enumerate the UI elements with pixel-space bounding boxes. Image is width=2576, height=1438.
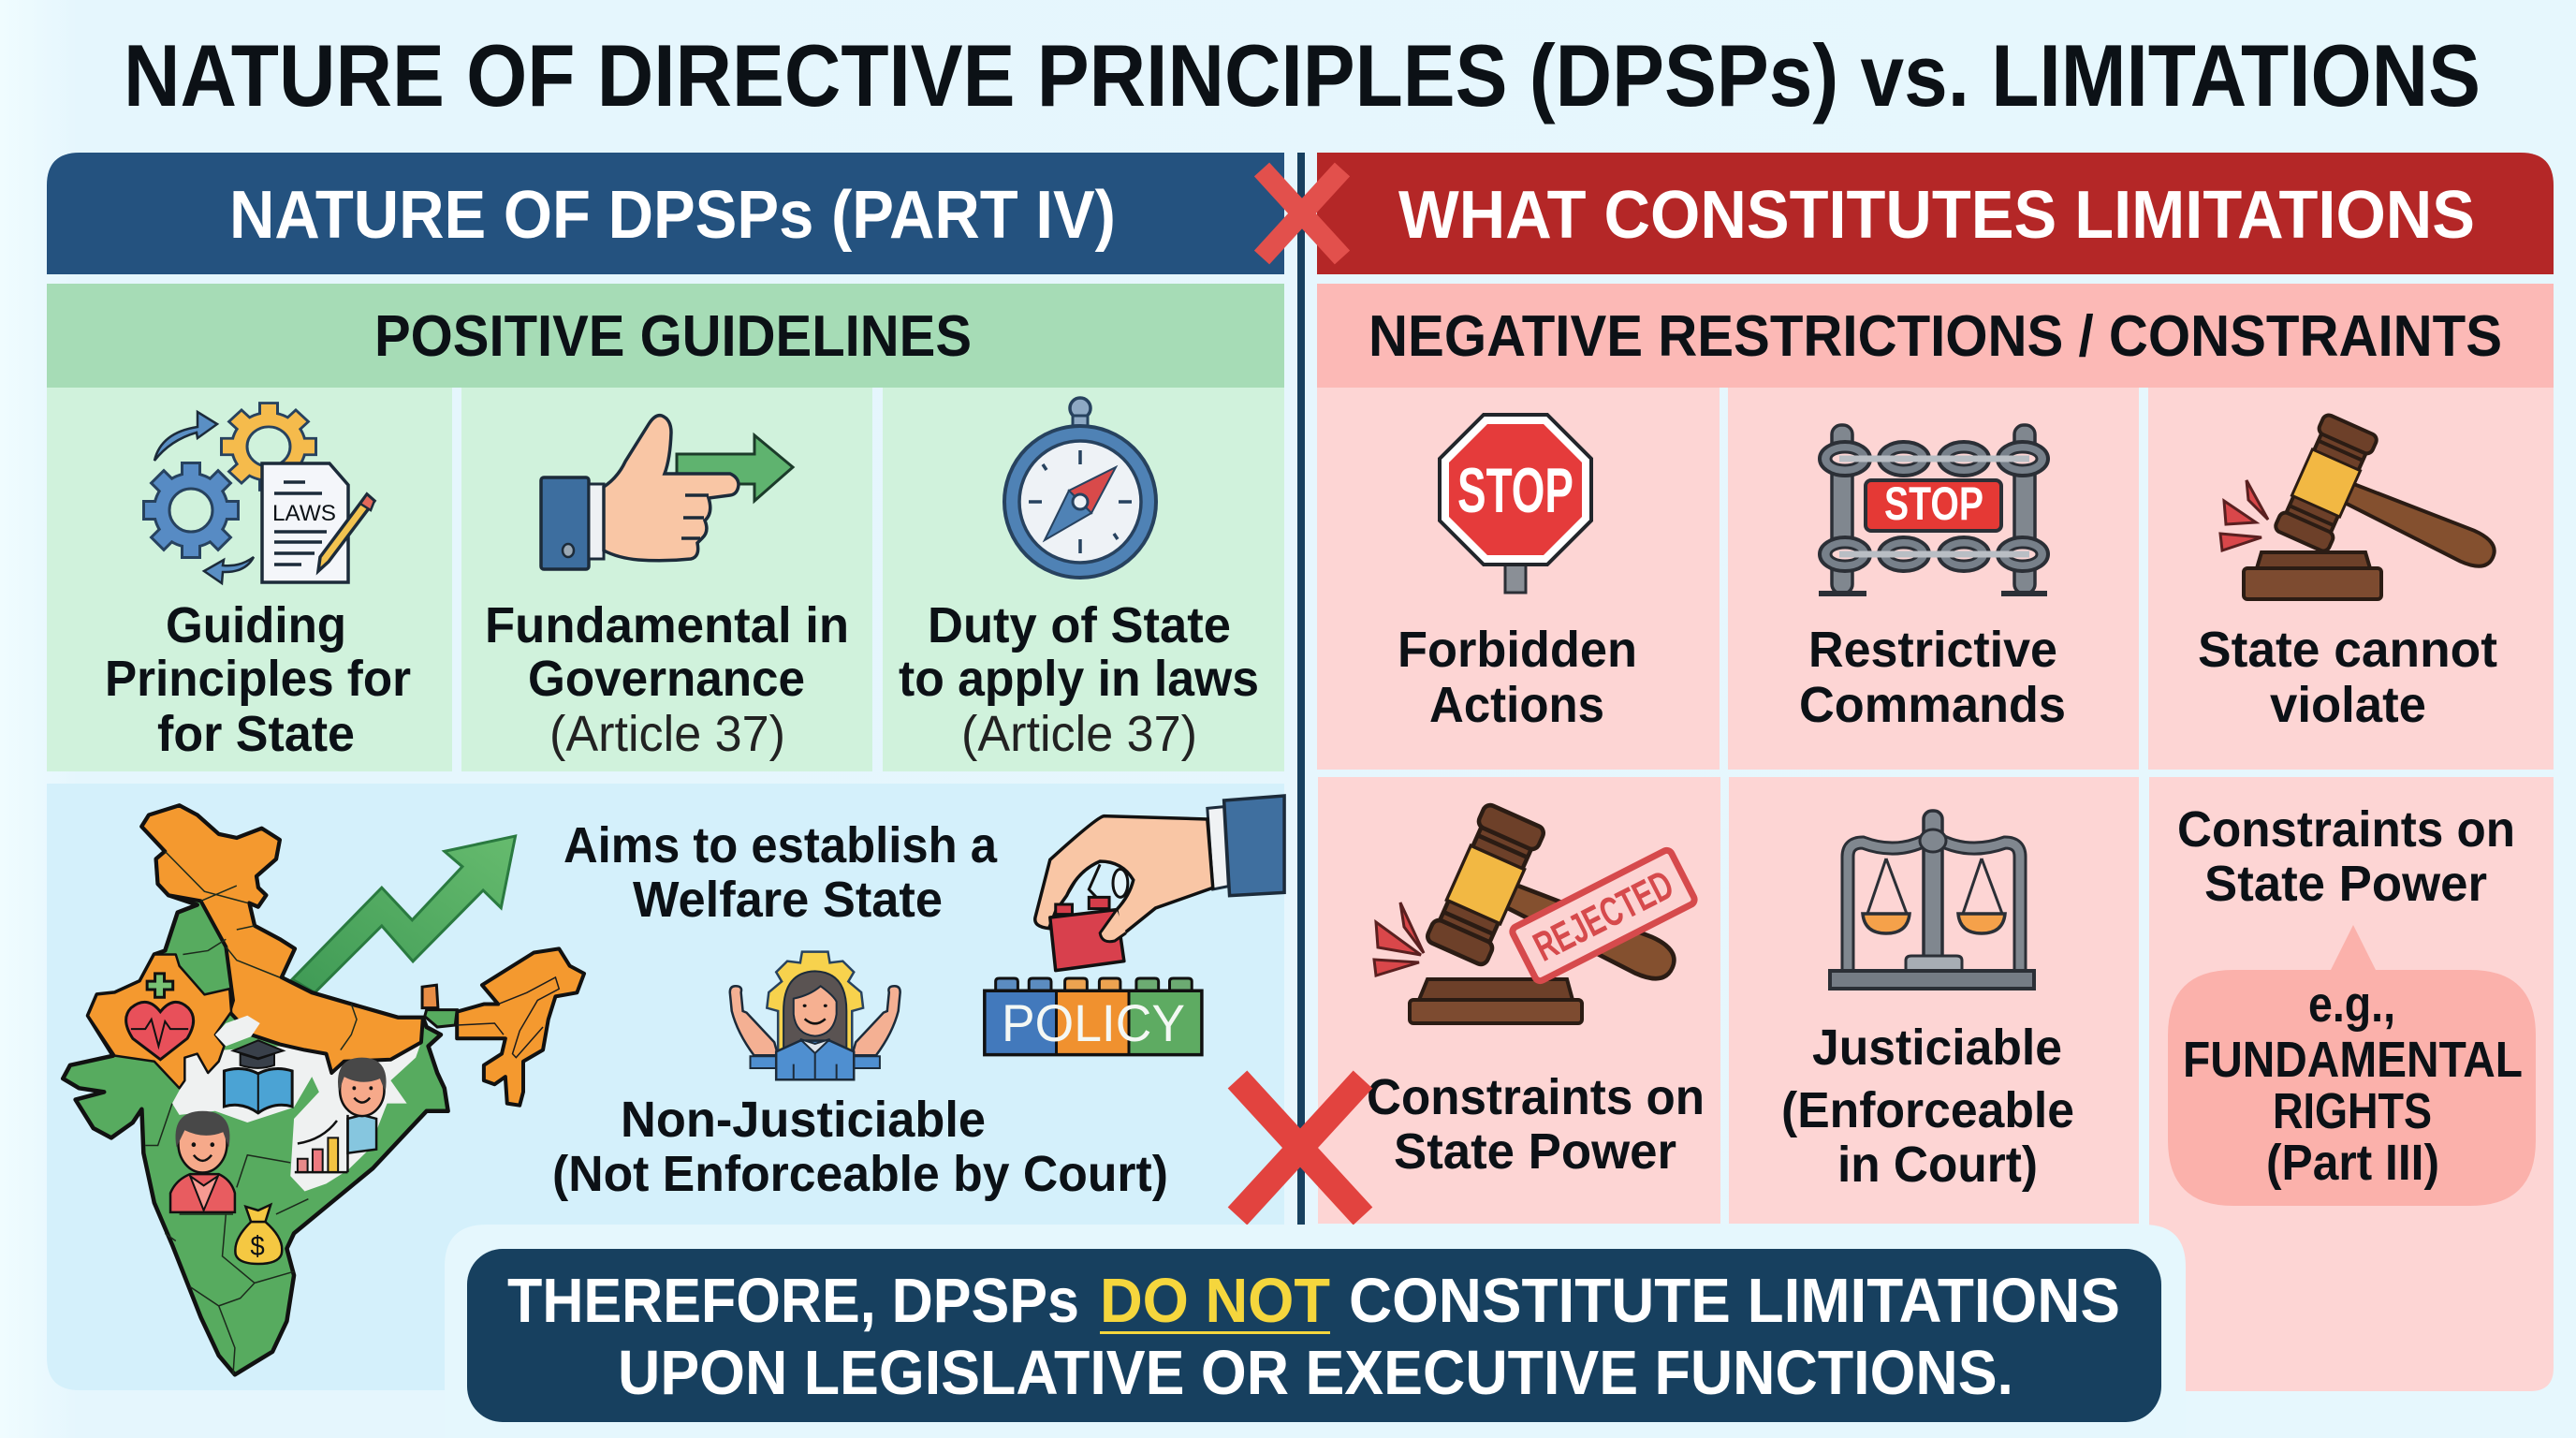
icon: money bag	[235, 1205, 282, 1264]
header: what constitutes limitations: WHAT CONSTITUTES LIMITATIONS	[1398, 178, 2475, 253]
card: constraints on state power example	[2149, 777, 2554, 1391]
text: conclusion first line	[507, 1266, 2120, 1336]
label: restrictive commands: Commands	[1799, 677, 2066, 733]
icon: stop sign	[1440, 415, 1591, 593]
callout: fundamental rights: e.g.,	[2308, 976, 2395, 1033]
panel: nature of DPSPs	[47, 153, 1284, 1390]
label: fundamental in governance	[485, 597, 849, 762]
label: forbidden actions	[1398, 622, 1637, 733]
label: duty of state: (Article 37)	[961, 706, 1197, 762]
label: fundamental in governance: Governance	[528, 651, 805, 707]
icon: red cross top	[1262, 169, 1342, 257]
map: mainland	[63, 805, 448, 1374]
icon: gavel with rejected stamp	[1374, 803, 1703, 1036]
arrow: rising growth	[292, 836, 516, 992]
card: guiding principles	[47, 388, 452, 771]
label: constraints on state power	[1367, 1069, 1705, 1180]
text: conclusion first line: DO NOT	[1100, 1266, 1330, 1336]
label: guiding principles	[105, 597, 411, 762]
header: nature of DPSPs: NATURE OF DPSPs (PART IV)	[229, 178, 1116, 253]
card: restrictive commands	[1728, 388, 2139, 770]
icon: health heart	[126, 974, 194, 1060]
icon: gavel with rejected stamp: REJECTED	[1527, 861, 1681, 971]
callout: fundamental rights: RIGHTS	[2273, 1083, 2432, 1139]
label: constraints on state power: Constraints on	[2177, 801, 2515, 858]
label: constraints on state power	[2177, 801, 2515, 912]
icon: hand placing policy block	[985, 796, 1284, 1055]
header: what constitutes limitations	[1317, 153, 2554, 274]
label: constraints on state power: Constraints on	[1367, 1069, 1705, 1125]
label: fundamental in governance: Fundamental in	[485, 597, 849, 653]
map: northern states	[141, 805, 423, 1073]
label: state cannot violate	[2198, 622, 2497, 733]
label: policy blocks: POLICY	[1002, 993, 1185, 1052]
map: northeast	[457, 948, 584, 1106]
map: rajasthan	[88, 955, 231, 1088]
icon: gears and laws document: LAWS	[272, 501, 336, 526]
label: justiciable: (Enforceable	[1781, 1082, 2074, 1138]
label: fundamental in governance: (Article 37)	[549, 706, 785, 762]
label: restrictive commands: Restrictive	[1808, 622, 2057, 678]
icon: chained stop barrier: STOP	[1884, 477, 1983, 530]
text: welfare state aim	[564, 817, 998, 928]
icon: pointing hand with arrow	[541, 416, 793, 569]
label: justiciable: in Court)	[1837, 1137, 2038, 1193]
label: guiding principles: Principles for	[105, 651, 411, 707]
icon: person with red shirt	[170, 1111, 235, 1212]
text: conclusion first line: THEREFORE, DPSPs	[507, 1266, 1079, 1336]
icon: stop sign: STOP	[1457, 455, 1573, 526]
panel: welfare state	[47, 784, 1284, 1390]
header: nature of DPSPs	[47, 153, 1284, 274]
subheader: negative restrictions	[1317, 284, 2554, 388]
text: welfare state aim: Welfare State	[633, 872, 943, 928]
label: state cannot violate: violate	[2270, 677, 2426, 733]
label: duty of state: Duty of State	[928, 597, 1231, 653]
label: duty of state: to apply in laws	[899, 651, 1259, 707]
icon: education book	[224, 1040, 292, 1113]
text: welfare state aim: Aims to establish a	[564, 817, 998, 873]
label: forbidden actions: Actions	[1429, 677, 1604, 733]
card: state cannot violate	[2148, 388, 2554, 770]
label: constraints on state power: State Power	[2204, 856, 2487, 912]
icon: red cross bottom	[1237, 1079, 1363, 1216]
card: forbidden actions	[1317, 388, 1720, 770]
label: forbidden actions: Forbidden	[1398, 622, 1637, 678]
label: guiding principles: Guiding	[166, 597, 346, 653]
label: restrictive commands	[1799, 622, 2066, 733]
label: justiciable: Justiciable	[1812, 1020, 2062, 1076]
icon: india map	[63, 805, 584, 1374]
icon: person with blue shirt	[338, 1058, 387, 1153]
subheader: negative restrictions: NEGATIVE RESTRICTIONS / CONSTRAINTS	[1368, 304, 2502, 369]
divider line	[1297, 153, 1305, 1250]
text: non-justiciable: (Not Enforceable by Court)	[552, 1146, 1168, 1202]
card: constraints on state power	[1318, 777, 1720, 1224]
conclusion banner	[445, 1225, 2186, 1438]
subheader: positive guidelines: POSITIVE GUIDELINES	[374, 304, 972, 369]
card: justiciable	[1729, 777, 2139, 1224]
callout: fundamental rights: (Part III)	[2266, 1135, 2439, 1191]
card: fundamental in governance	[461, 388, 872, 771]
icon: money bag: $	[250, 1231, 265, 1262]
callout: fundamental rights: FUNDAMENTAL	[2183, 1032, 2523, 1088]
callout: fundamental rights	[2168, 925, 2536, 1206]
icon: balance scale	[1830, 811, 2034, 989]
text: non-justiciable: Non-Justiciable	[621, 1092, 986, 1148]
icon: gears and laws document	[142, 402, 374, 583]
label: guiding principles: for State	[157, 706, 355, 762]
icon: compass	[1004, 398, 1156, 578]
icon: person with open hands and gear	[730, 952, 900, 1079]
label: state cannot violate: State cannot	[2198, 622, 2497, 678]
subheader: positive guidelines	[47, 284, 1284, 388]
icon: gavel	[2220, 413, 2519, 615]
label: duty of state	[899, 597, 1259, 762]
label: constraints on state power: State Power	[1394, 1123, 1676, 1180]
icon: bar chart	[295, 1115, 347, 1172]
map: state borders	[145, 851, 357, 1374]
text: non-justiciable	[552, 1092, 1168, 1202]
map: central states	[172, 1042, 421, 1191]
label: justiciable	[1781, 1020, 2074, 1193]
icon: chained stop barrier	[1819, 425, 2048, 596]
card: duty of state	[883, 388, 1284, 771]
map: white blob	[215, 1016, 260, 1046]
text: conclusion first line: CONSTITUTE LIMITATIONS	[1349, 1266, 2120, 1336]
panel: what constitutes limitations	[1317, 153, 2554, 1391]
text: conclusion second line: UPON LEGISLATIVE OR EXECUTIVE FUNCTIONS.	[618, 1338, 2013, 1408]
